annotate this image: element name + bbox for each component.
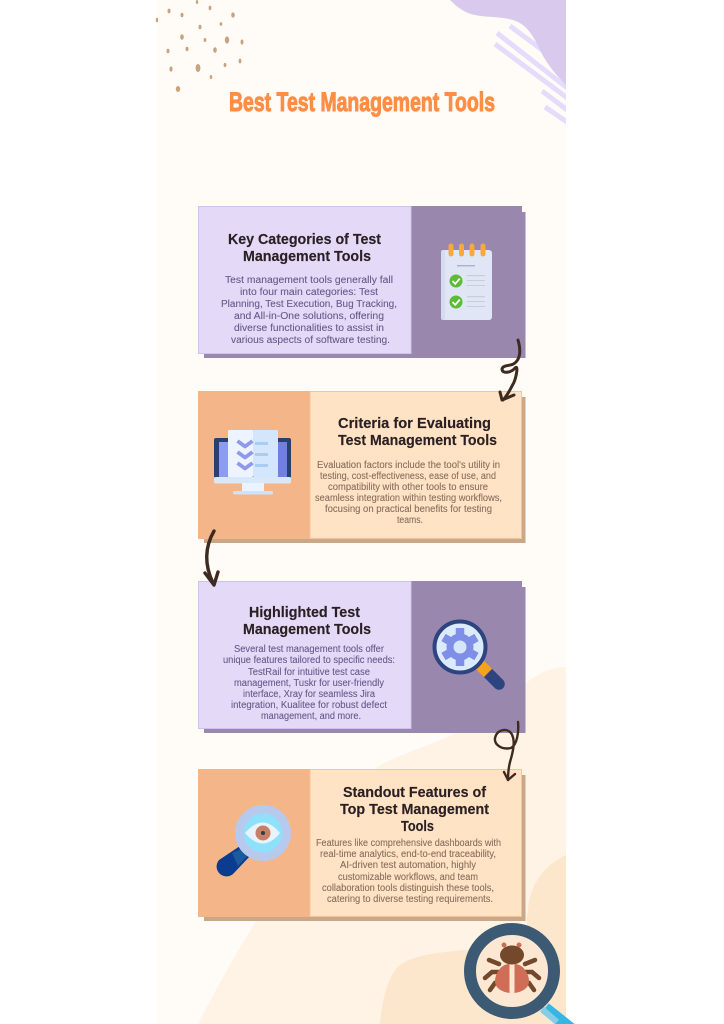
- heading: standout features: [340, 785, 489, 835]
- bug figure: [485, 942, 539, 993]
- text: highlighted tools body: TestRail for intuitive test case: [248, 667, 370, 678]
- text: standout features body: customizable workflows, and team: [338, 872, 478, 883]
- text: key categories body: diverse functionalities to assist in: [234, 323, 384, 334]
- text: evaluation criteria body: Evaluation factors include the tool's utility in: [317, 460, 500, 471]
- text: highlighted tools body: unique features tailored to specific needs:: [223, 655, 395, 666]
- text: evaluation criteria body: teams.: [397, 515, 423, 526]
- title: Best Test Management Tools: [229, 87, 495, 117]
- icon: monitor checklist: [214, 430, 291, 494]
- heading: key categories: [228, 232, 381, 265]
- panel: key categories: [198, 206, 526, 358]
- text: evaluation criteria body: seamless integration within testing workflows,: [315, 493, 502, 504]
- text: standout features body: catering to diverse testing requirements.: [327, 894, 493, 905]
- icon: bug under magnifier: [470, 929, 580, 1024]
- background blobs: [198, 667, 566, 1024]
- heading: key categories: Management Tools: [243, 249, 371, 265]
- text: key categories body: and All-in-One solutions, offering: [234, 311, 384, 322]
- heading: highlighted tools: Highlighted Test: [249, 605, 360, 621]
- arrow: panel 2 to panel 3: [205, 531, 218, 585]
- arrow: panel 3 to panel 4: [495, 722, 518, 780]
- text: standout features body: [316, 838, 501, 905]
- decorative stripes and purple corner: [450, 0, 570, 124]
- text: highlighted tools body: management, Tuskr for user-friendly: [234, 678, 384, 689]
- heading: key categories: Key Categories of Test: [228, 232, 381, 248]
- decorative dots: [156, 0, 244, 92]
- icon: magnifier with gear: [434, 622, 499, 684]
- watermark text in lens: diagrams: [492, 1004, 530, 1014]
- panel: standout features: [198, 769, 526, 921]
- panel: highlighted tools: [198, 581, 526, 733]
- text: evaluation criteria body: focusing on practical benefits for testing: [325, 504, 492, 515]
- icon: magnifier with eye: [217, 805, 291, 876]
- text: highlighted tools body: interface, Xray for seamless Jira: [243, 689, 375, 700]
- text: key categories body: into four main categories: Test: [240, 287, 378, 298]
- heading: evaluation criteria: [338, 416, 497, 449]
- arrow: panel 1 to panel 2: [500, 340, 520, 400]
- text: highlighted tools body: integration, Kualitee for robust defect: [231, 700, 387, 711]
- text: evaluation criteria body: testing, cost-effectiveness, ease of use, and: [320, 471, 496, 482]
- text: standout features body: real-time analytics, end-to-end traceability,: [320, 849, 496, 860]
- text: key categories body: Test management tools generally fall: [225, 275, 393, 286]
- heading: standout features: Standout Features of: [343, 785, 486, 801]
- panel: evaluation criteria: [198, 391, 526, 543]
- text: highlighted tools body: [223, 644, 395, 722]
- text: highlighted tools body: Several test management tools offer: [234, 644, 385, 655]
- heading: standout features: Top Test Management: [340, 802, 489, 818]
- text: evaluation criteria body: compatibility with other tools to ensure: [328, 482, 488, 493]
- heading: standout features: Tools: [401, 819, 434, 835]
- heading: evaluation criteria: Criteria for Evaluating: [338, 416, 491, 432]
- text: standout features body: AI-driven test automation, highly: [340, 860, 476, 871]
- text: standout features body: collaboration tools distinguish these tools,: [322, 883, 494, 894]
- text: key categories body: [221, 275, 397, 346]
- icon: checklist notepad: [441, 246, 492, 320]
- heading: highlighted tools: [243, 605, 371, 638]
- page background: [157, 0, 566, 1024]
- text: key categories body: Planning, Test Execution, Bug Tracking,: [221, 299, 397, 310]
- text: standout features body: Features like comprehensive dashboards with: [316, 838, 501, 849]
- heading: highlighted tools: Management Tools: [243, 622, 371, 638]
- heading: evaluation criteria: Test Management Tools: [338, 433, 497, 449]
- text: evaluation criteria body: [315, 460, 502, 526]
- text: highlighted tools body: management, and more.: [261, 711, 361, 722]
- text: key categories body: various aspects of software testing.: [231, 335, 390, 346]
